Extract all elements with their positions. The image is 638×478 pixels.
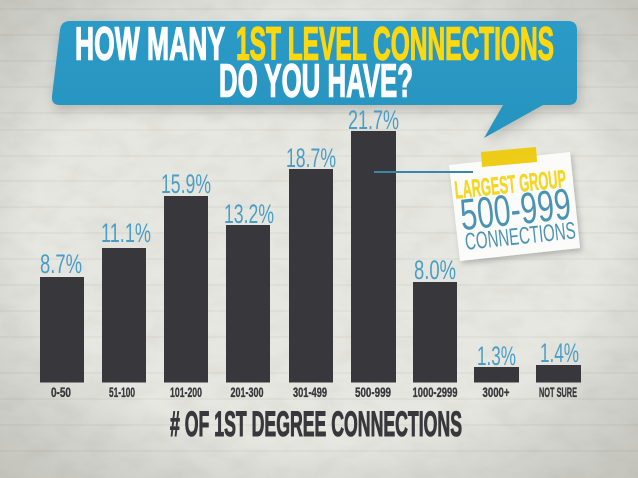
bar 3000+	[474, 341, 519, 400]
title line 1: HOW MANY	[75, 18, 225, 70]
bar 0-50	[40, 249, 84, 400]
bar 301-499	[286, 143, 336, 400]
callout text: CONNECTIONS	[464, 217, 577, 256]
bar 0-50: 0-50	[51, 384, 71, 400]
bar 1000-2999: 1000-2999	[412, 384, 458, 400]
title line 2: DO YOU HAVE?	[219, 54, 413, 106]
bar not sure	[536, 338, 581, 400]
callout text	[453, 165, 577, 256]
bar not sure: 1.4%	[540, 338, 579, 368]
title speech bubble	[52, 18, 577, 138]
callout text: 500-999	[458, 180, 573, 240]
bar 1000-2999: 8.0%	[414, 255, 456, 285]
callout note	[449, 147, 580, 261]
bar 301-499: 301-499	[293, 384, 327, 400]
note paper	[449, 152, 580, 261]
tape	[481, 147, 537, 167]
bar 0-50: 8.7%	[40, 249, 82, 279]
bar 51-100: 11.1%	[101, 218, 151, 248]
bar 3000+: 3000+	[482, 384, 510, 400]
bar 51-100	[101, 218, 151, 400]
bar 201-300: 13.2%	[224, 199, 274, 229]
bar 101-200	[161, 169, 211, 400]
bar 201-300: 201-300	[230, 384, 264, 400]
bar 301-499: 18.7%	[286, 143, 336, 173]
bar 201-300	[224, 199, 274, 400]
bar chart	[40, 105, 581, 400]
bar not sure: NOT SURE	[539, 384, 577, 400]
bar 500-999: 500-999	[355, 384, 391, 400]
bar 51-100: 51-100	[109, 384, 135, 400]
bar 3000+: 1.3%	[477, 341, 516, 371]
bar 101-200: 101-200	[170, 384, 202, 400]
bar 101-200: 15.9%	[161, 169, 211, 199]
bar 500-999	[348, 105, 399, 400]
connector line	[374, 171, 473, 173]
bar 1000-2999	[412, 255, 458, 400]
bar 500-999: 21.7%	[348, 105, 399, 135]
